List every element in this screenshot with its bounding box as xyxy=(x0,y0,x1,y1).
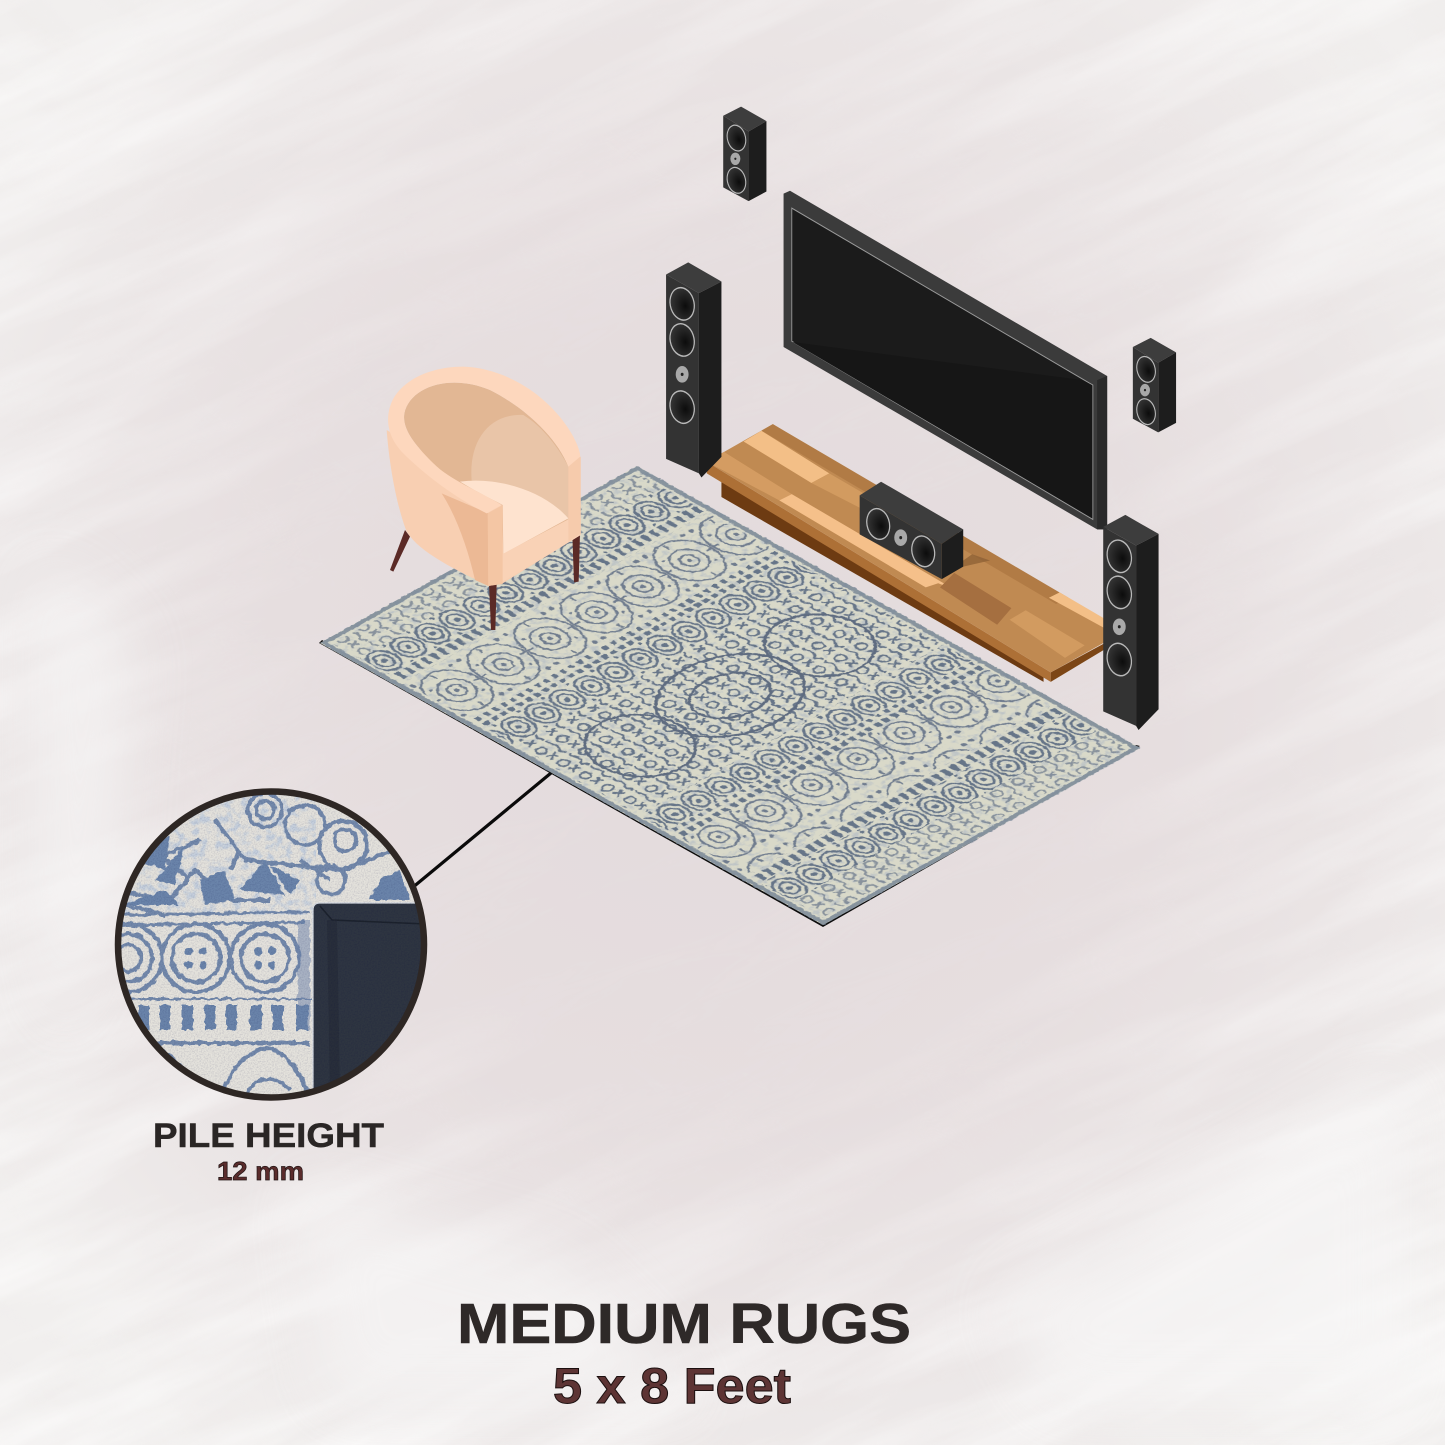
chair side shadow xyxy=(442,493,488,586)
label: 12 mm: 12 mm xyxy=(217,1156,304,1186)
inset grain xyxy=(116,790,426,1100)
chair seat front xyxy=(503,517,581,582)
subtitle: size: 5 x 8 Feet xyxy=(553,1358,791,1414)
chair back highlight xyxy=(471,415,568,520)
tall speaker left xyxy=(666,262,721,478)
chair inner back xyxy=(404,383,568,554)
TV unit shelf xyxy=(707,424,1104,682)
centre speaker xyxy=(860,482,963,579)
rug with patterned bands xyxy=(319,466,1140,927)
chair right post xyxy=(568,457,581,542)
chair cushion xyxy=(460,481,568,554)
inset circle: pile height close-up xyxy=(94,790,426,1100)
small speaker top left xyxy=(723,107,766,201)
inset speckle xyxy=(116,790,316,915)
label: pile height: PILE HEIGHT xyxy=(153,1117,384,1155)
title: medium rugs: MEDIUM RUGS xyxy=(457,1292,911,1356)
home theatre set xyxy=(666,107,1176,730)
chair legs xyxy=(390,530,580,630)
rug black edge xyxy=(319,640,1140,927)
inset rug underside xyxy=(313,903,426,1100)
connector line from rug to inset xyxy=(412,773,551,888)
chair arm front xyxy=(488,505,503,586)
small speaker right xyxy=(1133,338,1176,432)
chair outer shell xyxy=(387,430,581,586)
armchair xyxy=(387,367,581,630)
tall speaker right xyxy=(1103,515,1159,730)
inset rug pattern xyxy=(121,794,390,1093)
rug surface xyxy=(320,466,1140,925)
chair rim xyxy=(388,367,580,513)
television xyxy=(784,191,1107,529)
